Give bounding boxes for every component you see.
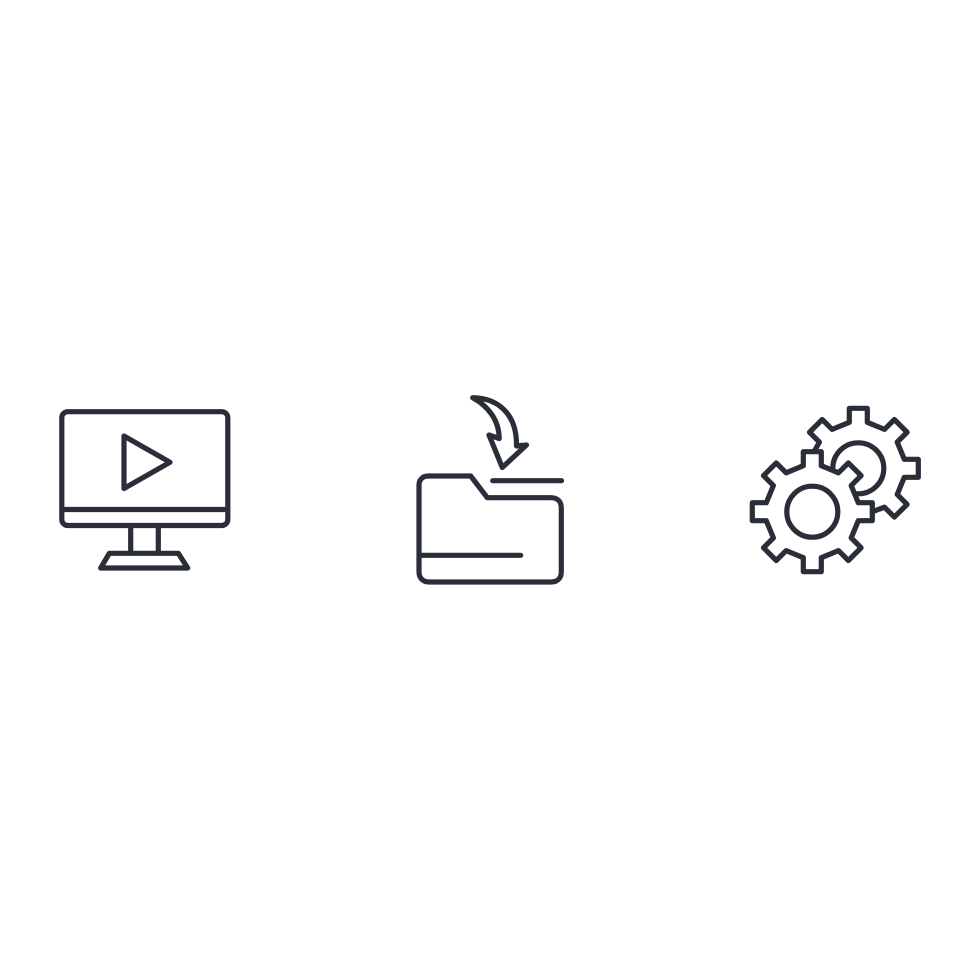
folder upper line xyxy=(493,478,562,483)
monitor screen frame xyxy=(62,412,228,526)
icon: gears xyxy=(752,408,918,572)
monitor bottom bezel line xyxy=(62,507,228,512)
monitor neck xyxy=(131,526,158,553)
back gear xyxy=(810,408,918,517)
folder outline xyxy=(419,476,561,582)
monitor base xyxy=(101,553,188,568)
curved arrow xyxy=(473,398,526,468)
play triangle xyxy=(124,436,170,488)
folder lower line xyxy=(419,553,521,558)
front gear xyxy=(752,452,872,572)
icon: video monitor xyxy=(62,412,228,568)
icon: folder with arrow xyxy=(419,398,562,582)
